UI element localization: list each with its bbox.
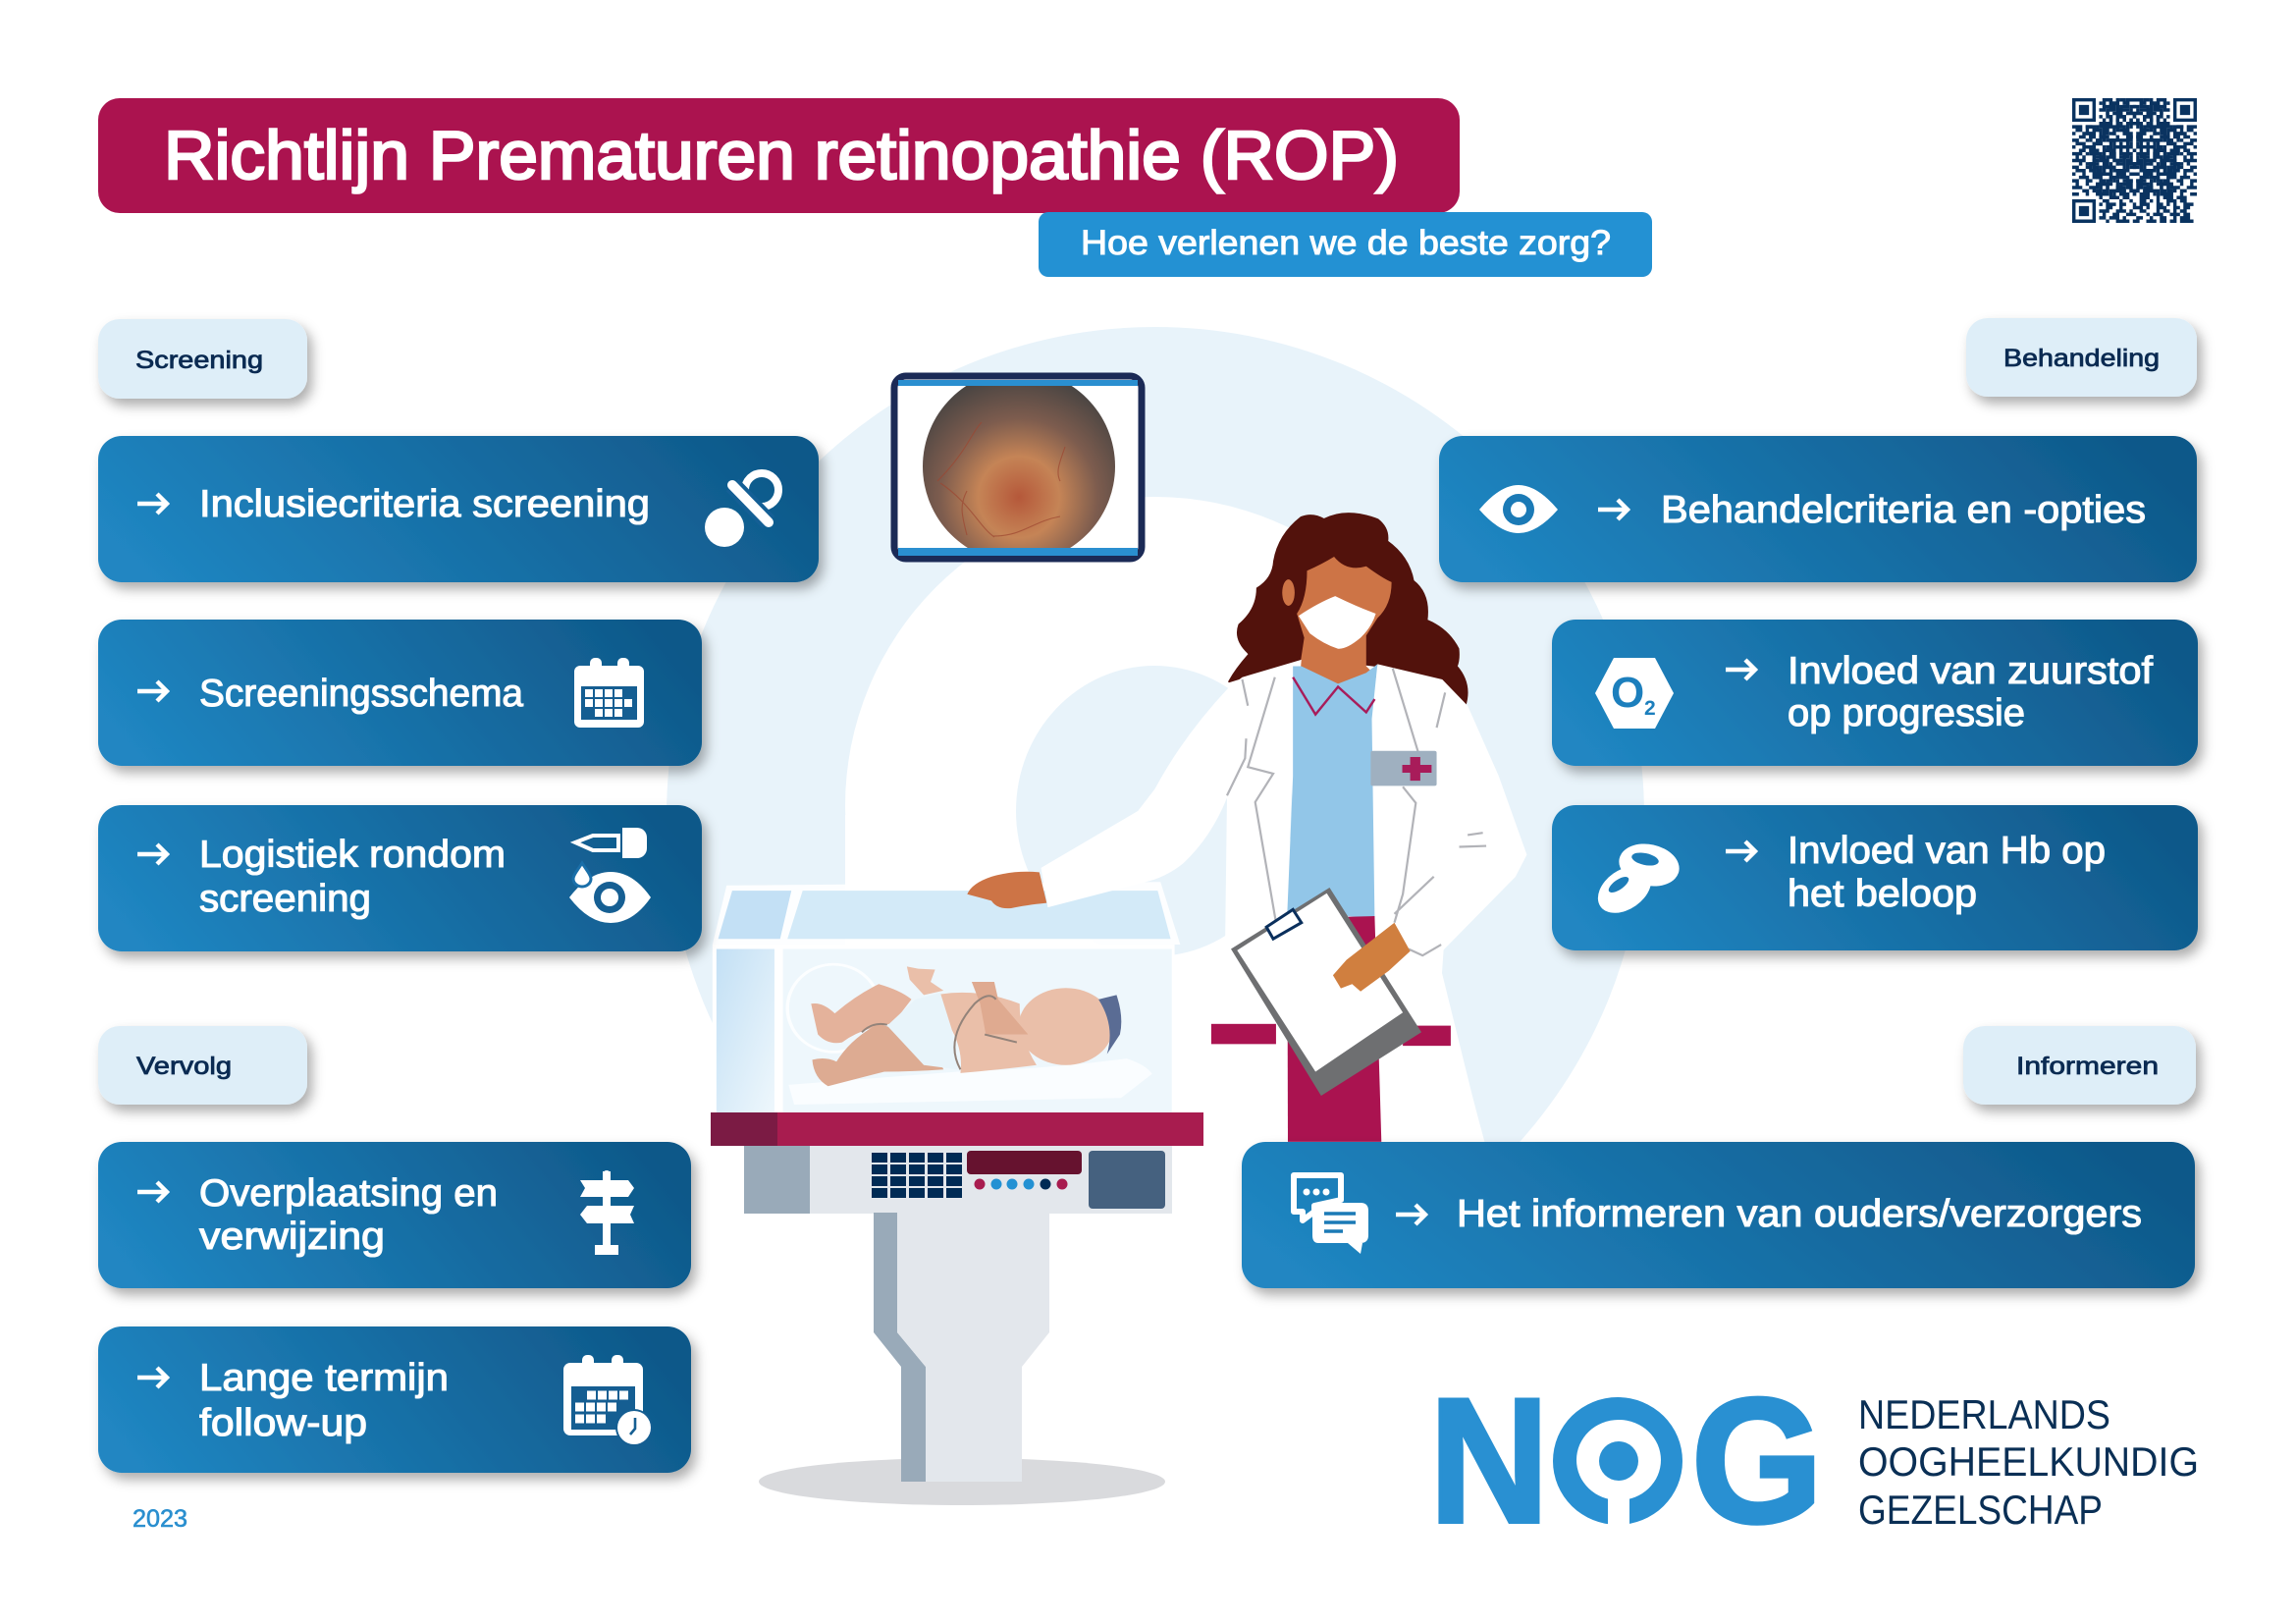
card: Invloed van Hb op het beloop: Invloed van Hb op xyxy=(1788,830,2106,872)
incubator xyxy=(711,882,1203,1505)
tab: Screening: Screening xyxy=(135,347,263,374)
card: Lange termijn follow-up xyxy=(98,1326,691,1473)
shirt collar xyxy=(1293,677,1374,715)
arrow xyxy=(1396,1205,1425,1224)
doctor right hand xyxy=(1333,923,1411,992)
tab: Screening xyxy=(98,319,307,399)
arrow xyxy=(137,844,167,864)
blanket xyxy=(788,1058,1152,1105)
card: Invloed van zuurstof op progressie: op progressie xyxy=(1788,692,2025,734)
NOG logo: G xyxy=(1691,1362,1823,1560)
card: Het informeren van ouders/verzorgers: Het informeren van ouders/verzorgers xyxy=(1457,1193,2142,1235)
card: Invloed van Hb op het beloop xyxy=(1552,805,2198,950)
card: Behandelcriteria en -opties: Behandelcriteria en -opties xyxy=(1661,489,2146,531)
tab: Behandeling xyxy=(1966,318,2197,397)
arrow xyxy=(137,494,167,514)
right belt bar xyxy=(1403,1026,1451,1046)
QR code xyxy=(2072,100,2197,221)
icon: pacifier xyxy=(705,473,778,547)
NOG logo: N xyxy=(1429,1362,1549,1560)
logo eye letter O xyxy=(1553,1397,1682,1528)
doctor coat xyxy=(1041,660,1526,1142)
icon: eye xyxy=(1479,485,1558,533)
arrow xyxy=(137,681,167,701)
incubator tray xyxy=(711,1112,1203,1146)
tab: Informeren xyxy=(1963,1026,2196,1105)
subtitle banner xyxy=(1039,212,1652,277)
background: eye shape rings xyxy=(667,327,1644,1142)
tab: Behandeling: Behandeling xyxy=(2003,345,2160,372)
tab: Informeren: Informeren xyxy=(2016,1053,2159,1080)
coat lapel lines xyxy=(1227,669,1486,955)
arrow xyxy=(1726,660,1755,679)
doctor left hand xyxy=(967,872,1046,908)
title banner: Richtlijn Prematuren retinopathie (ROP) xyxy=(164,117,1399,193)
card: Screeningsschema xyxy=(98,620,702,766)
arrow xyxy=(137,1368,167,1387)
arrow xyxy=(1598,500,1628,519)
icon: calendar with clock xyxy=(563,1355,653,1446)
trousers xyxy=(1287,916,1381,1142)
subtitle banner: Hoe verlenen we de beste zorg? xyxy=(1081,224,1611,262)
card: Invloed van zuurstof op progressie xyxy=(1552,620,2198,766)
title banner xyxy=(98,98,1460,213)
card: Inclusiecriteria screening xyxy=(98,436,819,582)
card: Logistiek rondom screening: screening xyxy=(199,878,371,920)
arrow xyxy=(137,1182,167,1202)
card: Lange termijn follow-up: Lange termijn xyxy=(199,1357,449,1399)
incubator hood xyxy=(713,882,1180,1113)
card: Het informeren van ouders/verzorgers xyxy=(1242,1142,2195,1288)
doctor hair xyxy=(1229,514,1467,706)
incubator stand xyxy=(874,1213,1049,1482)
card: Overplaatsing en verwijzing xyxy=(98,1142,691,1288)
incubator control panel xyxy=(744,1146,1172,1214)
card: Logistiek rondom screening: Logistiek rondom xyxy=(199,834,506,876)
card: Lange termijn follow-up: follow-up xyxy=(199,1402,367,1444)
NOG logo xyxy=(1429,1362,2199,1560)
card: Invloed van Hb op het beloop: het beloop xyxy=(1788,873,1977,915)
clipboard xyxy=(1231,888,1421,1096)
arrow xyxy=(1726,841,1755,861)
card: Overplaatsing en verwijzing: verwijzing xyxy=(199,1216,385,1258)
icon: oxygen hexagon: O xyxy=(1611,669,1644,717)
NOG logo: NEDERLANDS xyxy=(1858,1391,2110,1437)
card: Overplaatsing en verwijzing: Overplaatsing en xyxy=(199,1172,498,1215)
card: Screeningsschema: Screeningsschema xyxy=(199,673,523,715)
year label: 2023 xyxy=(133,1505,187,1533)
doctor illustration xyxy=(967,514,1526,1142)
left belt bar xyxy=(1211,1024,1276,1044)
fundus photo monitor xyxy=(894,370,1142,563)
icon: oxygen hexagon xyxy=(1595,658,1674,729)
baby xyxy=(811,966,1121,1086)
floor shadow xyxy=(759,1458,1165,1505)
tab: Vervolg: Vervolg xyxy=(136,1053,232,1080)
card: Logistiek rondom screening xyxy=(98,805,702,951)
card: Invloed van zuurstof op progressie: Invloed van zuurstof xyxy=(1788,650,2153,692)
icon: calendar xyxy=(574,658,644,728)
name badge xyxy=(1370,751,1437,785)
NOG logo: OOGHEELKUNDIG xyxy=(1858,1438,2199,1485)
icon: red blood cells xyxy=(1589,839,1683,923)
icon: eye drop xyxy=(569,828,651,923)
card: Behandelcriteria en -opties xyxy=(1439,436,2197,582)
doctor ear xyxy=(1282,579,1295,606)
doctor shirt xyxy=(1287,664,1377,918)
tab: Vervolg xyxy=(98,1026,307,1105)
halo xyxy=(787,964,880,1052)
icon: signpost xyxy=(580,1170,634,1255)
icon: oxygen hexagon: 2 xyxy=(1644,697,1656,720)
face mask xyxy=(1299,596,1376,649)
NOG logo: GEZELSCHAP xyxy=(1858,1487,2103,1533)
icon: chat bubbles xyxy=(1294,1175,1368,1254)
card: Inclusiecriteria screening: Inclusiecriteria screening xyxy=(199,483,650,525)
doctor face and neck xyxy=(1297,557,1392,686)
